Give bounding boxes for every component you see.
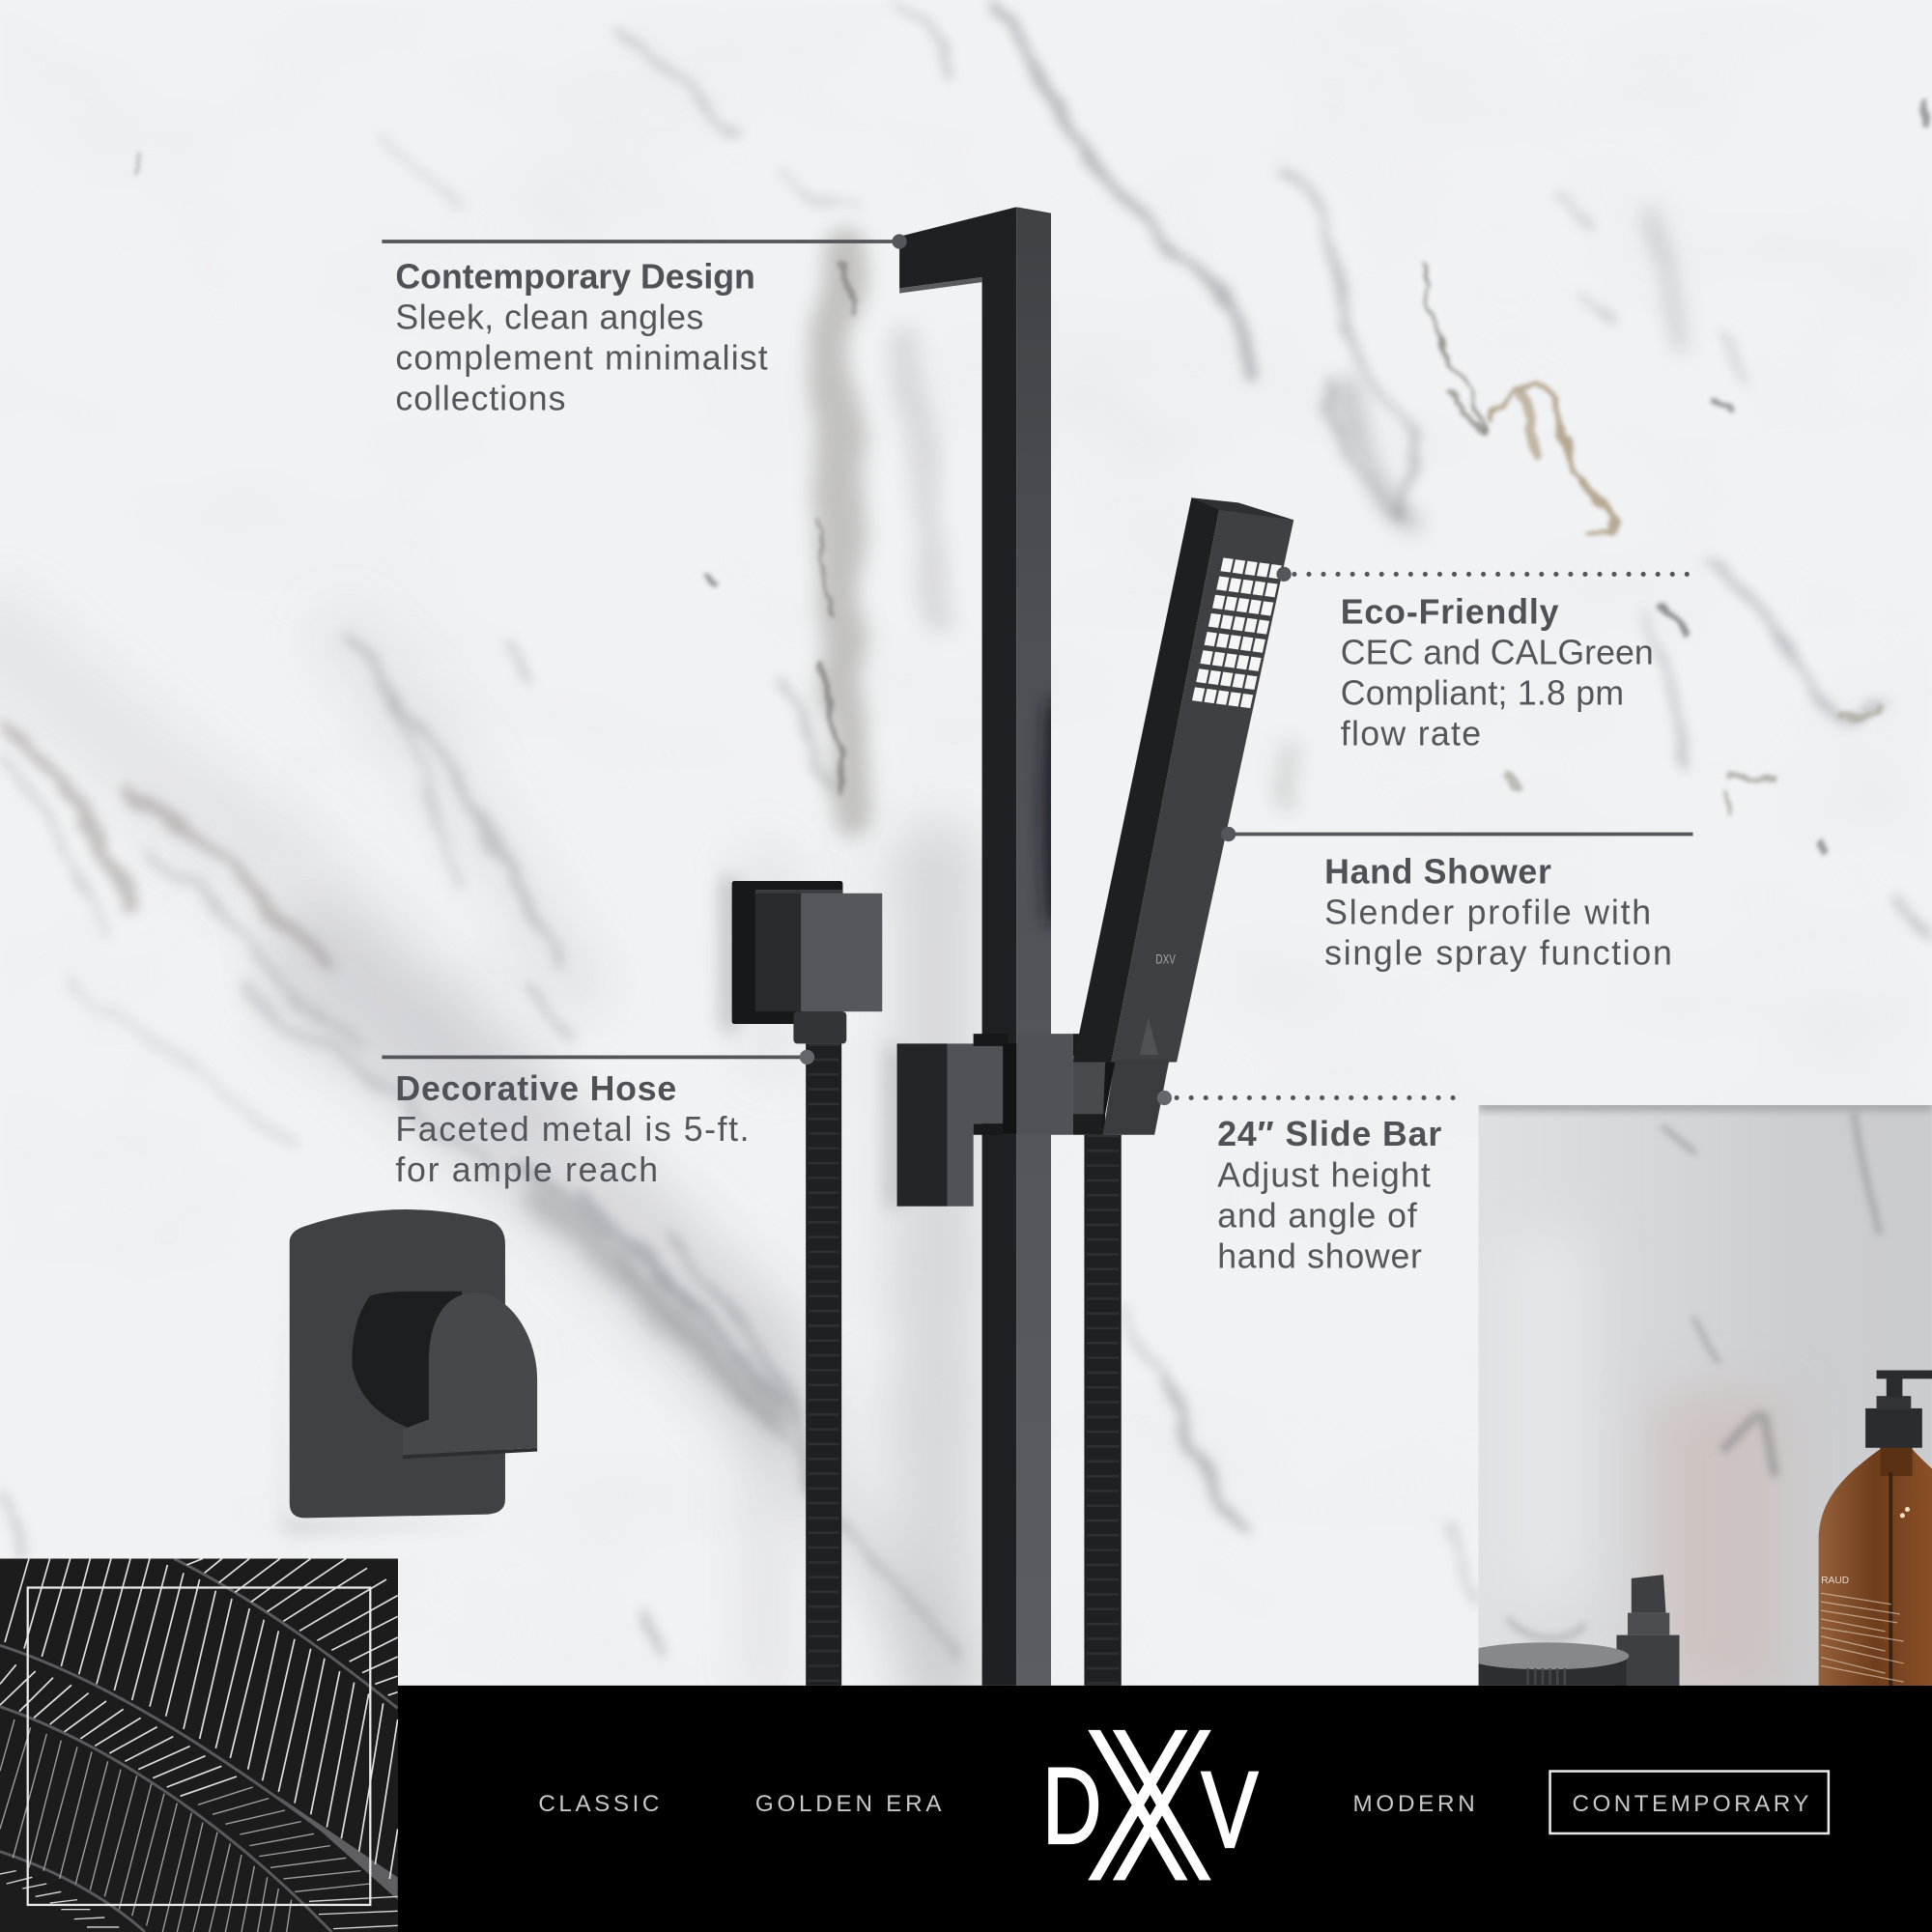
thermostatic valve trim	[290, 1209, 537, 1518]
callout: eco-friendly: CEC and CALGreen	[1341, 633, 1654, 671]
callout: hand shower	[1221, 827, 1693, 973]
inset white frame	[28, 1587, 370, 1905]
hand shower cradle	[1103, 1060, 1169, 1135]
callout: slide bar: 24″ Slide Bar	[1217, 1115, 1441, 1153]
icon: small pump bottle	[1616, 1575, 1680, 1686]
collection nav labels	[538, 1772, 1829, 1833]
slide bar holder	[897, 1034, 1105, 1207]
callout: eco-friendly	[1276, 567, 1690, 753]
callout: decorative hose: for ample reach	[395, 1151, 658, 1189]
collection nav labels: CLASSIC	[538, 1791, 659, 1817]
callout: slide bar: and angle of	[1217, 1196, 1417, 1235]
callout: hand shower: Slender profile with	[1324, 894, 1651, 932]
inset architectural photo	[0, 1558, 398, 1932]
callout: eco-friendly: flow rate	[1341, 715, 1481, 753]
callout: decorative hose	[382, 1050, 814, 1189]
hand shower	[1073, 497, 1293, 1062]
callout: contemporary design: collections	[395, 380, 565, 418]
collection nav labels: MODERN	[1353, 1791, 1475, 1817]
decorative hose	[806, 1043, 841, 1686]
icon: amber pump bottle	[1819, 1370, 1932, 1686]
callout: slide bar	[1157, 1091, 1466, 1275]
callout: contemporary design: Contemporary Design	[395, 257, 755, 296]
callout: contemporary design	[382, 234, 907, 418]
callout: eco-friendly: Compliant; 1.8 pm	[1341, 674, 1624, 713]
icon: amber pump bottle: RAUD	[1821, 1576, 1849, 1586]
hand shower hose	[1084, 1135, 1122, 1686]
hand shower cast shadow on bar	[1034, 694, 1051, 932]
callout: contemporary design: complement minimalist	[395, 339, 768, 378]
callout: hand shower: Hand Shower	[1324, 853, 1551, 892]
collection nav labels: CONTEMPORARY	[1573, 1791, 1808, 1817]
wall mount supply elbow	[732, 881, 882, 1043]
DXV logo	[1042, 1730, 1258, 1880]
icon: handle logo: DXV	[1155, 951, 1176, 966]
callout: contemporary design: Sleek, clean angles	[395, 298, 703, 337]
DXV logo: D	[1042, 1745, 1101, 1866]
fixture shadows	[281, 877, 899, 1531]
footer bar	[398, 1686, 1932, 1932]
callout: decorative hose: Faceted metal is 5-ft.	[395, 1110, 750, 1149]
callout: slide bar: Adjust height	[1217, 1155, 1431, 1194]
callout: decorative hose: Decorative Hose	[395, 1069, 676, 1108]
icon: ribbed jar	[1463, 1642, 1629, 1686]
callout: slide bar: hand shower	[1217, 1236, 1422, 1275]
shower niche with toiletries	[1463, 1100, 1932, 1700]
callout: eco-friendly: Eco-Friendly	[1341, 592, 1559, 631]
callout: hand shower: single spray function	[1324, 934, 1672, 973]
collection nav labels: GOLDEN ERA	[755, 1791, 942, 1817]
icon: spray nozzle grid	[1192, 557, 1282, 708]
slide bar	[899, 207, 1051, 1686]
DXV logo: V	[1202, 1748, 1258, 1870]
